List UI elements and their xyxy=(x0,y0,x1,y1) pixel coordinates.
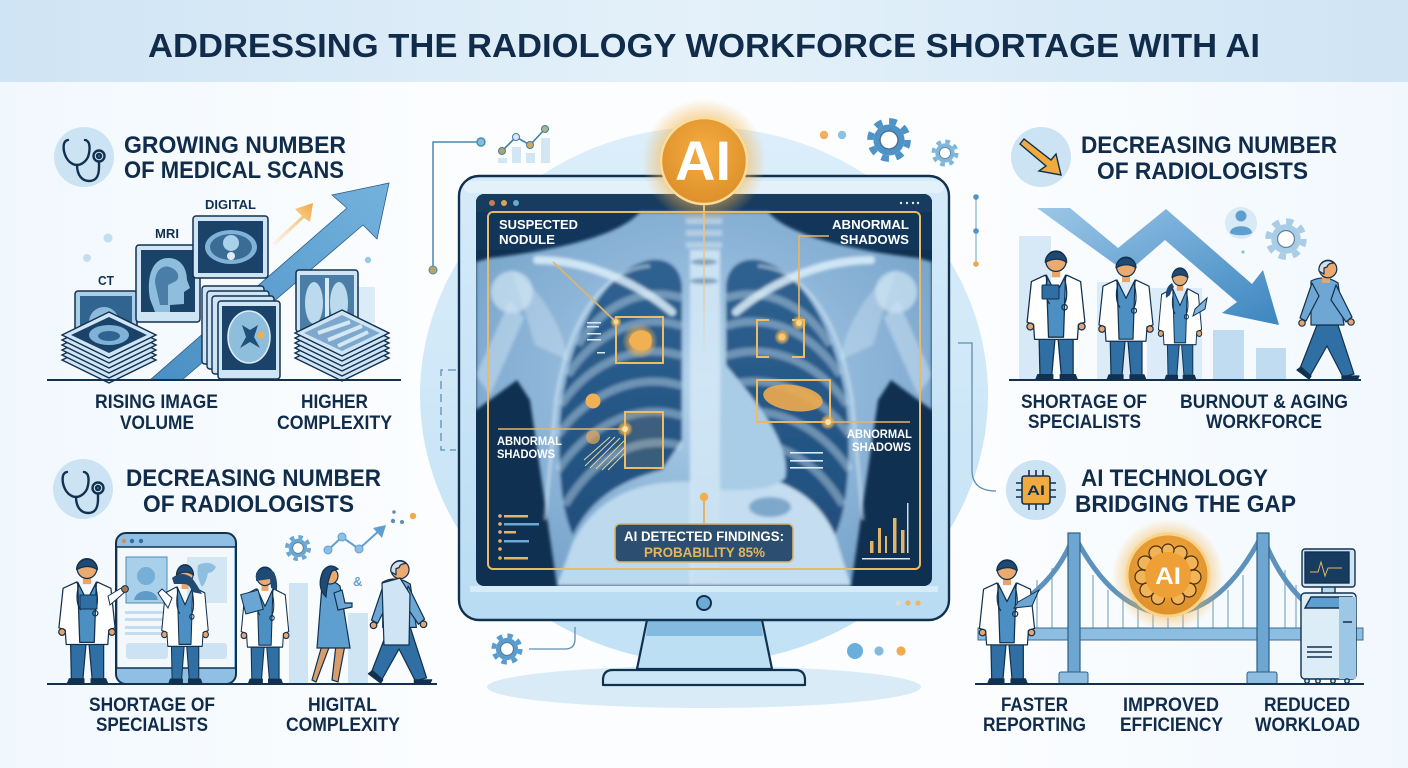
scan stack: brain xyxy=(202,286,280,379)
callout: suspected nodule xyxy=(499,217,663,363)
label: improved efficiency: IMPROVED xyxy=(1123,695,1219,716)
label: higher complexity: COMPLEXITY xyxy=(277,413,392,434)
findings label: PROBABILITY 85% xyxy=(644,544,766,560)
x-ray body xyxy=(476,212,932,586)
power button xyxy=(697,596,711,610)
ampersand mark: & xyxy=(353,574,362,589)
person: doctor with tablet xyxy=(979,560,1039,684)
x-ray diaphragm, heart and spine xyxy=(557,482,692,586)
person: older man walking xyxy=(1297,260,1359,380)
label: improved efficiency xyxy=(1120,695,1223,736)
callout: abnormal shadows lower left: SHADOWS xyxy=(497,447,555,461)
center guide line xyxy=(703,204,705,364)
scan: digital chest xyxy=(193,216,268,278)
heading xyxy=(1075,465,1296,518)
heading: OF MEDICAL SCANS xyxy=(124,157,344,184)
label: shortage of specialists xyxy=(1021,392,1147,433)
callout: suspected nodule: NODULE xyxy=(499,232,555,247)
background halo circle xyxy=(420,127,988,663)
panel: decreasing number of radiologists (lower left) xyxy=(47,459,437,736)
background bars xyxy=(289,583,368,684)
screen: chest x-ray xyxy=(476,194,932,586)
label: higital complexity: COMPLEXITY xyxy=(286,715,400,736)
label: higher complexity: HIGHER xyxy=(301,392,368,413)
tablet interface xyxy=(116,533,236,684)
person: woman in blue dress xyxy=(312,566,352,682)
stand shadow xyxy=(487,666,921,708)
stack: CT sheets xyxy=(62,312,156,383)
heading: DECREASING NUMBER xyxy=(126,465,381,492)
scan labels: MRI xyxy=(155,227,179,241)
falling zigzag arrow xyxy=(1037,208,1279,325)
ground line xyxy=(47,683,437,685)
header band xyxy=(0,0,1408,82)
label: rising image volume: VOLUME xyxy=(120,413,194,434)
callout: abnormal shadows lower left xyxy=(497,394,663,470)
AI badge: AI xyxy=(675,129,731,192)
label: shortage of specialists xyxy=(89,695,215,736)
ground line xyxy=(47,379,401,381)
label: shortage of specialists: SHORTAGE OF xyxy=(89,695,215,716)
person: woman with tablet xyxy=(1158,268,1207,380)
bar chart background xyxy=(1019,236,1286,380)
label: burnout and aging workforce: BURNOUT & AGING xyxy=(1180,392,1348,413)
findings label xyxy=(615,493,793,562)
label: shortage of specialists: SPECIALISTS xyxy=(1028,412,1141,433)
monitor stand xyxy=(603,620,805,685)
label: higital complexity xyxy=(286,695,400,736)
icon: AI chip xyxy=(1006,460,1066,520)
scan labels xyxy=(98,198,256,288)
label: faster reporting xyxy=(983,695,1086,736)
medical scanner machine xyxy=(1301,549,1356,683)
rising arrow xyxy=(150,183,389,380)
icon: gear xyxy=(1268,221,1304,257)
panel: AI technology bridging the gap xyxy=(975,460,1364,736)
person: doctor pointing xyxy=(59,559,128,684)
bezel indicator dots xyxy=(895,600,921,606)
label: reduced workload xyxy=(1255,695,1360,736)
findings label: AI DETECTED FINDINGS: xyxy=(624,528,784,544)
icon: down arrow xyxy=(1011,127,1071,187)
icon: user badge xyxy=(1225,207,1257,254)
heading: GROWING NUMBER xyxy=(124,132,346,159)
title: ADDRESSING THE RADIOLOGY WORKFORCE SHORTAGE WITH AI xyxy=(148,27,1260,64)
callout: abnormal shadows lower right xyxy=(757,380,912,454)
label: improved efficiency: EFFICIENCY xyxy=(1120,715,1223,736)
scan labels: DIGITAL xyxy=(205,198,256,212)
label: higher complexity xyxy=(277,392,392,434)
person: woman doctor gesturing xyxy=(158,565,208,684)
panel: decreasing number of radiologists (top right) xyxy=(1009,127,1361,433)
decoration: gear and dots bottom xyxy=(494,636,906,662)
heading xyxy=(126,465,381,518)
AI badge xyxy=(642,99,766,223)
label: faster reporting: FASTER xyxy=(1001,695,1068,716)
monitor bezel xyxy=(459,176,949,620)
AI brain badge: AI xyxy=(1155,563,1181,590)
small bar chart lower right xyxy=(862,503,910,560)
decoration: connector brackets xyxy=(441,343,996,649)
heading: OF RADIOLOGISTS xyxy=(1097,158,1308,185)
small data bars lower left xyxy=(498,514,539,560)
label: faster reporting: REPORTING xyxy=(983,715,1086,736)
callout: abnormal shadows upper right: ABNORMAL xyxy=(832,217,909,232)
AI brain badge xyxy=(1112,519,1224,631)
stack: x-ray sheets xyxy=(295,310,389,381)
small text lines lower right xyxy=(790,452,823,469)
heading xyxy=(124,132,346,184)
orange small arrow xyxy=(272,203,313,245)
scan: chest x-ray xyxy=(296,270,358,332)
central illustration: AI monitor xyxy=(420,99,996,708)
label: burnout and aging workforce: WORKFORCE xyxy=(1206,412,1322,433)
ground line xyxy=(975,683,1364,685)
bridge xyxy=(978,533,1363,684)
callout: suspected nodule: SUSPECTED xyxy=(499,217,578,232)
person: doctor xyxy=(1099,257,1153,380)
person: doctor with clipboard xyxy=(1027,251,1085,380)
decoration: gears and dots top right xyxy=(820,121,979,267)
label: shortage of specialists: SHORTAGE OF xyxy=(1021,392,1147,413)
callout: abnormal shadows lower left: ABNORMAL xyxy=(497,434,562,448)
label: reduced workload: REDUCED xyxy=(1264,695,1350,716)
person: woman doctor with clipboard xyxy=(241,567,289,684)
panel: growing number of medical scans xyxy=(47,127,401,434)
decoration dots and bar xyxy=(83,234,375,323)
heading: AI TECHNOLOGY xyxy=(1081,465,1268,492)
label: rising image volume: RISING IMAGE xyxy=(95,392,218,413)
decoration: mini chart icon xyxy=(429,126,550,274)
callout: abnormal shadows upper right xyxy=(757,217,909,357)
icon: rising line chart xyxy=(324,510,416,554)
ground line xyxy=(1009,379,1361,381)
callout: abnormal shadows upper right: SHADOWS xyxy=(840,232,909,247)
label: burnout and aging workforce xyxy=(1180,392,1348,433)
heading: BRIDGING THE GAP xyxy=(1075,491,1296,518)
label: rising image volume xyxy=(95,392,218,434)
label: higital complexity: HIGITAL xyxy=(308,695,377,716)
callout: abnormal shadows lower right: ABNORMAL xyxy=(847,427,912,441)
icon: gear xyxy=(287,537,309,559)
scan: CT xyxy=(75,291,137,339)
icon: AI chip: AI xyxy=(1027,482,1045,498)
label: reduced workload: WORKLOAD xyxy=(1255,715,1360,736)
screen top bar dots xyxy=(489,200,919,206)
scan: MRI xyxy=(136,245,200,322)
scan labels: CT xyxy=(98,274,114,288)
label: shortage of specialists: SPECIALISTS xyxy=(96,715,208,736)
heading: DECREASING NUMBER xyxy=(1081,132,1337,159)
person: older man in coat xyxy=(368,561,432,684)
heading xyxy=(1081,132,1337,185)
x-ray left lung and ribs xyxy=(476,260,682,535)
callout: abnormal shadows lower right: SHADOWS xyxy=(852,440,911,454)
heading: OF RADIOLOGISTS xyxy=(143,491,354,518)
orange analysis frame xyxy=(488,212,920,569)
icon: stethoscope xyxy=(53,459,113,519)
icon: stethoscope xyxy=(54,127,114,187)
